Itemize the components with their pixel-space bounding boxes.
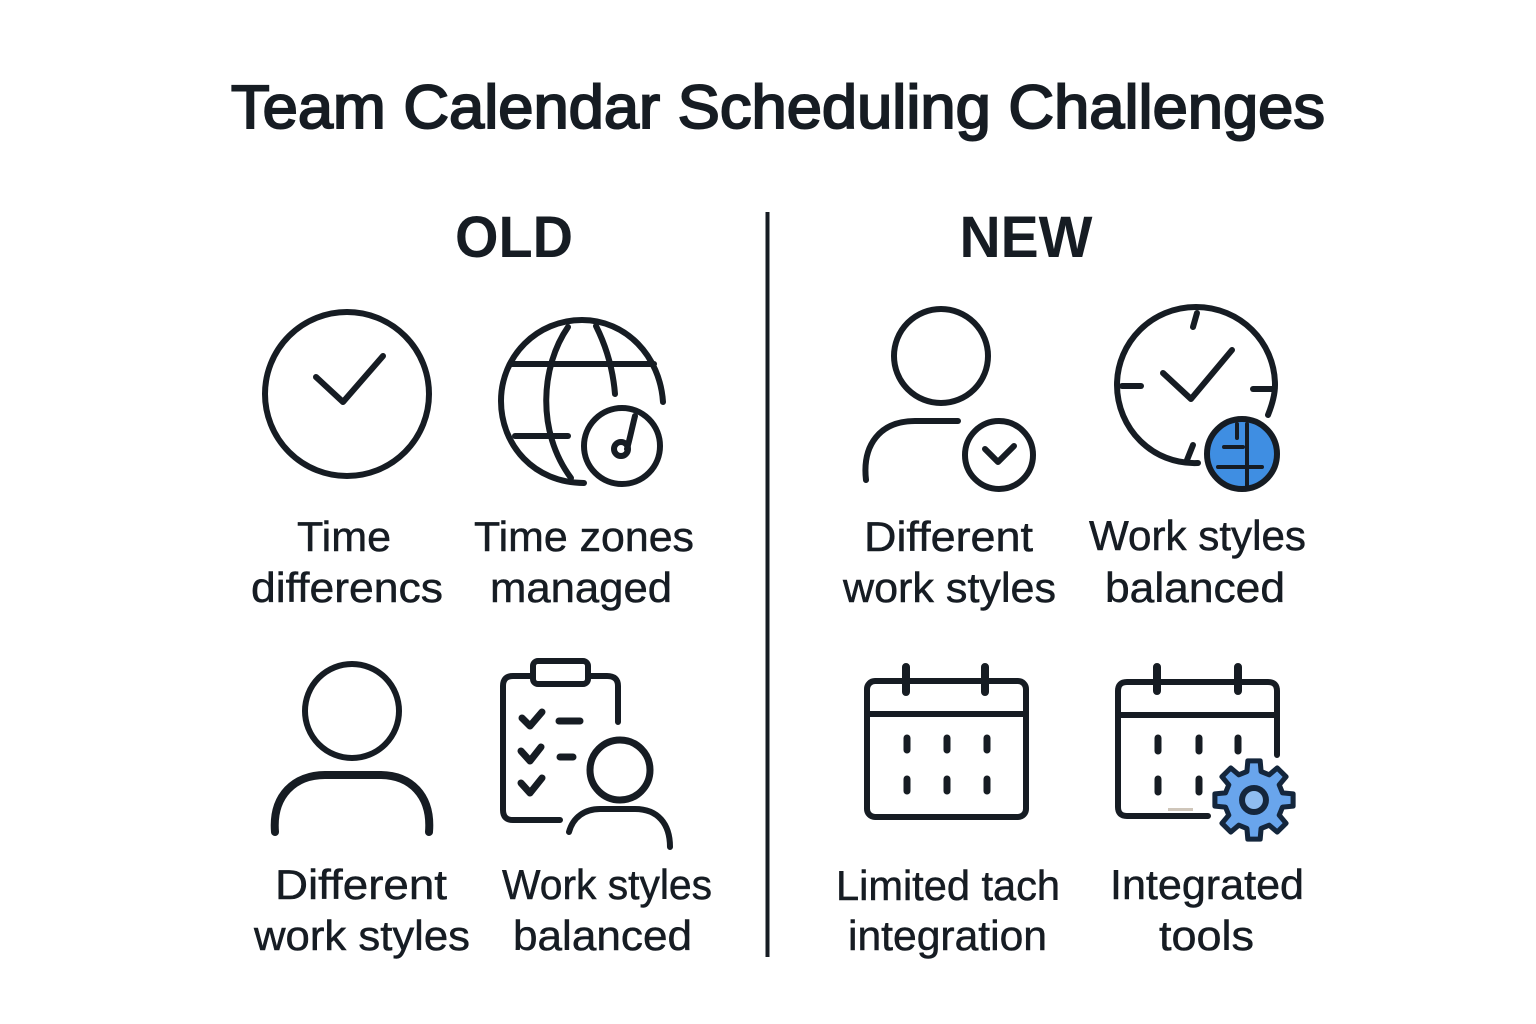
label: work styles balanced (old): Work styles (502, 861, 712, 908)
icon: clock check (265, 312, 429, 476)
label: work styles balanced (old): balanced (513, 912, 692, 959)
label: work styles balanced (old) (502, 861, 712, 959)
heading: NEW: NEW (960, 205, 1093, 270)
label: limited tech integration (836, 862, 1060, 959)
label: integrated tools (1110, 861, 1304, 959)
icon: checklist with person (503, 661, 670, 847)
label: different work styles: work styles (253, 912, 470, 959)
icon: person with check badge (865, 309, 1033, 489)
label: time zones managed: Time zones (474, 513, 694, 560)
icon: globe with clock (501, 320, 663, 484)
label: work styles balanced (new): balanced (1105, 564, 1285, 611)
label: time zones managed (474, 513, 694, 611)
label: different work styles (new): Different (864, 513, 1033, 560)
icon: person (275, 664, 429, 832)
label: limited tech integration: integration (848, 912, 1047, 959)
label: different work styles (253, 861, 470, 959)
label: time differences: Time (297, 513, 391, 560)
label: work styles balanced (new): Work styles (1089, 512, 1306, 559)
icon: calendar with blue gear (1118, 667, 1293, 839)
label: work styles balanced (new) (1089, 512, 1306, 611)
label: integrated tools: tools (1159, 912, 1254, 959)
label: different work styles (new) (842, 513, 1056, 611)
center divider (766, 212, 770, 957)
label: different work styles: Different (275, 861, 447, 908)
icon: calendar (867, 667, 1026, 817)
label: time differences: differencs (251, 564, 443, 611)
label: integrated tools: Integrated (1110, 861, 1304, 908)
title: Team Calendar Scheduling Challenges (231, 73, 1325, 141)
label: time zones managed: managed (490, 564, 672, 611)
label: limited tech integration: Limited tach (836, 862, 1060, 909)
label: time differences (251, 513, 443, 611)
heading: OLD: OLD (455, 205, 573, 270)
label: different work styles (new): work styles (842, 564, 1056, 611)
icon: clock with blue globe (1117, 307, 1277, 489)
